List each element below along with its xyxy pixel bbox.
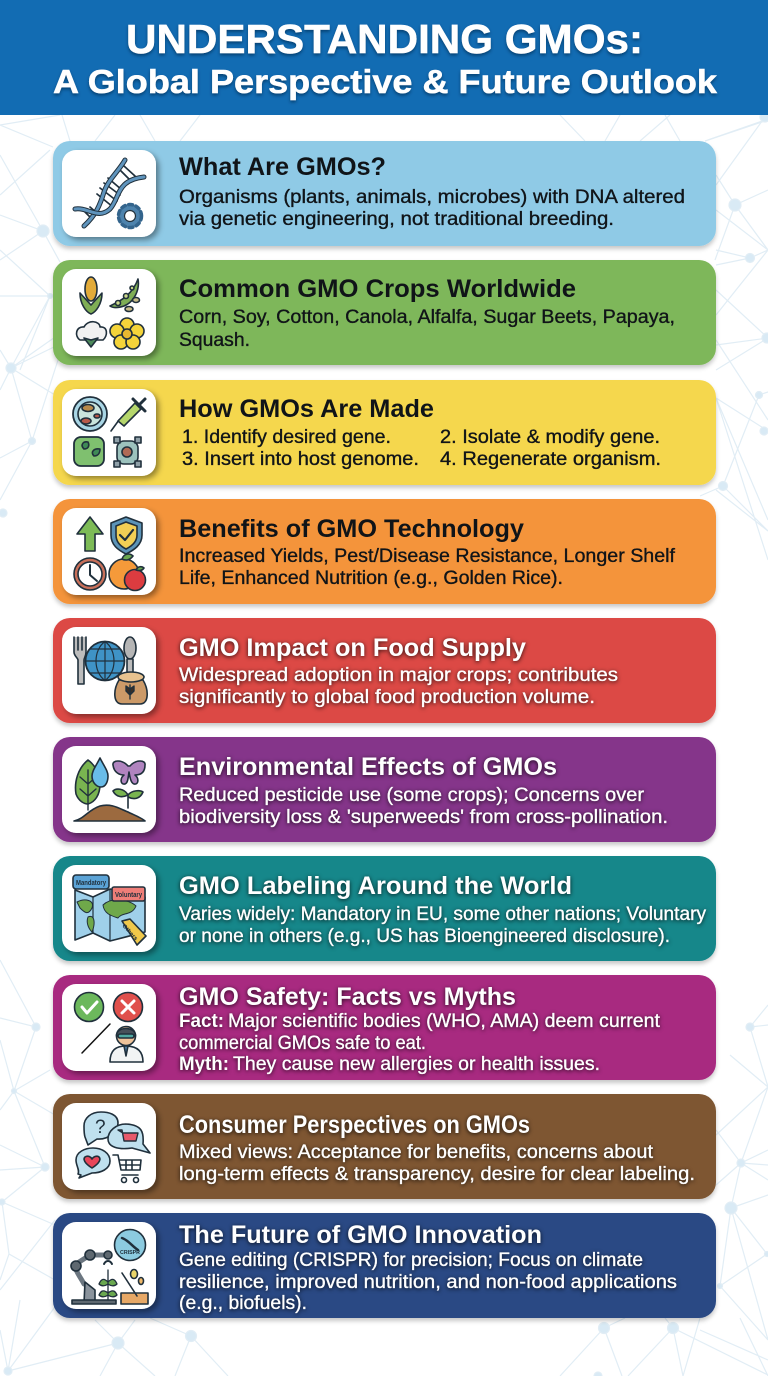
header banner <box>0 0 768 115</box>
icon: petri dish, syringe, tissue culture, gene cell <box>73 397 145 467</box>
icon: world map with labels: Voluntary <box>115 892 142 899</box>
panel: Environmental Effects of GMOs <box>53 737 716 842</box>
text block <box>179 545 676 589</box>
text block: Fact: <box>179 1011 224 1032</box>
icon: world map with labels <box>73 875 146 945</box>
text block <box>179 784 668 828</box>
text block: Life, Enhanced Nutrition (e.g., Golden Rice). <box>179 567 563 589</box>
text block: Widespread adoption in major crops; contributes <box>179 664 618 686</box>
icon: corn, soybean, cotton, canola <box>77 277 144 349</box>
steps list: 1. Identify desired gene. <box>182 426 391 448</box>
text block: Corn, Soy, Cotton, Canola, Alfalfa, Sugar Beets, Papaya, <box>179 306 675 328</box>
heading: Benefits of GMO Technology <box>179 515 524 543</box>
panel: Common GMO Crops Worldwide <box>53 260 716 365</box>
text block: Varies widely: Mandatory in EU, some other nations; Voluntary <box>179 903 706 925</box>
text block: Major scientific bodies (WHO, AMA) deem current <box>228 1010 661 1032</box>
heading: GMO Safety: Facts vs Myths <box>179 983 516 1011</box>
text block: Reduced pesticide use (some crops); Concerns over <box>179 784 645 806</box>
text block: Organisms (plants, animals, microbes) with DNA altered <box>179 186 685 208</box>
heading: The Future of GMO Innovation <box>179 1221 542 1249</box>
panel: GMO Safety: Facts vs Myths <box>53 975 716 1080</box>
text block: long-term effects & transparency, desire for clear labeling. <box>179 1163 695 1185</box>
panel: Consumer Perspectives on GMOs <box>53 1094 716 1199</box>
icon: check, cross, scientist <box>74 992 143 1062</box>
icon: robot arm, plant, CRISPR badge <box>71 1230 148 1304</box>
panel: What Are GMOs? <box>53 141 716 246</box>
panel: How GMOs Are Made <box>53 380 716 485</box>
text block: Squash. <box>179 329 250 351</box>
heading: Consumer Perspectives on GMOs <box>179 1111 530 1139</box>
icon: leaf, droplet, butterfly, sprout, soil <box>74 758 145 821</box>
icon: speech bubbles and cart: ? <box>95 1117 106 1138</box>
icon: world map with labels: Others <box>121 923 139 942</box>
steps list: 3. Insert into host genome. <box>182 448 419 470</box>
title: UNDERSTANDING GMOs: <box>126 16 643 62</box>
icon: globe, fork, spoon, grain sack <box>74 637 147 704</box>
panel: Benefits of GMO Technology <box>53 499 716 604</box>
title <box>53 16 718 100</box>
text block <box>179 664 618 708</box>
steps list <box>182 426 661 470</box>
icon: arrow, shield, clock, fruit <box>74 517 146 590</box>
text block: Gene editing (CRISPR) for precision; Focus on climate <box>179 1249 643 1271</box>
text block: significantly to global food production volume. <box>179 686 595 708</box>
text block <box>179 1141 695 1185</box>
steps list: 4. Regenerate organism. <box>440 448 661 470</box>
text block <box>179 186 685 230</box>
text block: via genetic engineering, not traditional breeding. <box>179 208 614 230</box>
icon: speech bubbles and cart <box>76 1112 150 1182</box>
text block: or none in others (e.g., US has Bioengineered disclosure). <box>179 925 670 947</box>
text block: commercial GMOs safe to eat. <box>179 1032 426 1054</box>
icon: DNA helix and gear <box>75 160 144 228</box>
text block <box>179 306 675 351</box>
panel: GMO Impact on Food Supply <box>53 618 716 723</box>
heading: What Are GMOs? <box>179 153 386 181</box>
steps list: 2. Isolate & modify gene. <box>440 426 660 448</box>
text block: resilience, improved nutrition, and non-food applications <box>179 1271 677 1293</box>
text block: Myth: <box>179 1054 229 1075</box>
heading: GMO Labeling Around the World <box>179 872 572 900</box>
heading: GMO Impact on Food Supply <box>179 634 526 662</box>
heading: Common GMO Crops Worldwide <box>179 275 576 303</box>
icon: world map with labels: Mandatory <box>76 880 106 887</box>
heading: How GMOs Are Made <box>179 395 434 423</box>
panel: The Future of GMO Innovation <box>53 1213 716 1318</box>
text block <box>179 1010 661 1075</box>
text block <box>179 1249 677 1314</box>
text block: Increased Yields, Pest/Disease Resistance, Longer Shelf <box>179 545 676 567</box>
text block <box>179 903 706 947</box>
icon: robot arm, plant, CRISPR badge: CRISPR <box>120 1250 140 1256</box>
heading: Environmental Effects of GMOs <box>179 753 557 781</box>
title: A Global Perspective & Future Outlook <box>53 63 718 100</box>
panel: GMO Labeling Around the World <box>53 856 716 961</box>
text block: They cause new allergies or health issues. <box>233 1053 600 1075</box>
text block: Mixed views: Acceptance for benefits, concerns about <box>179 1141 654 1163</box>
text block: biodiversity loss & 'superweeds' from cross-pollination. <box>179 806 668 828</box>
text block: (e.g., biofuels). <box>179 1292 307 1314</box>
